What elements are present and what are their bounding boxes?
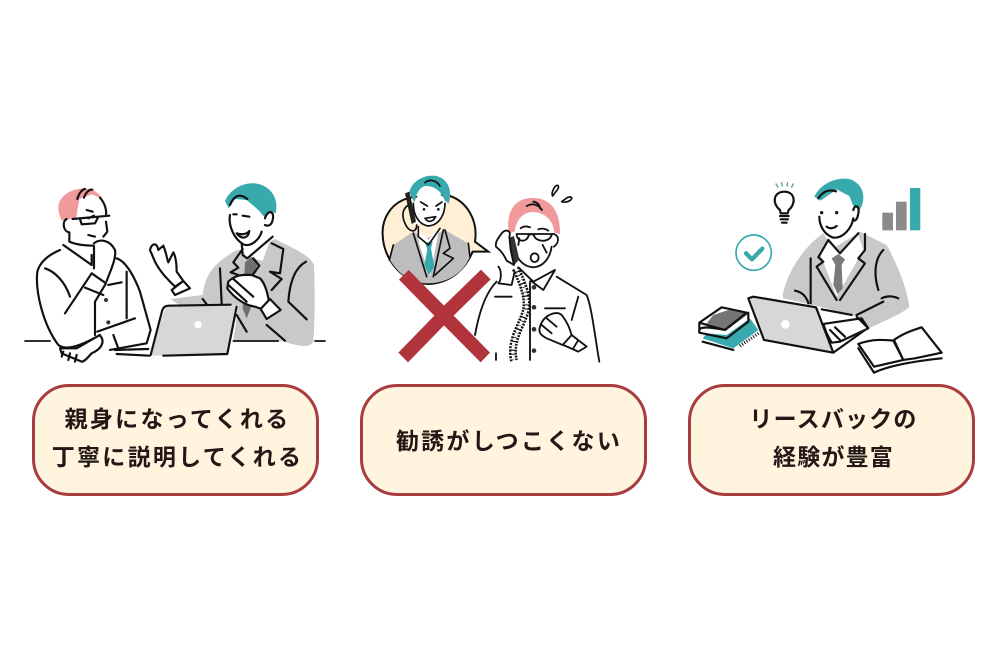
laptop (748, 297, 865, 353)
callout: rich leaseback experience (688, 384, 975, 496)
open notebook (858, 327, 942, 373)
callout: caring and explains carefully (32, 384, 319, 496)
check mark icon (736, 235, 771, 270)
red cross (398, 270, 491, 362)
advisor's teal hair (225, 183, 276, 218)
surprise marks (552, 185, 572, 202)
advisor outline (150, 196, 307, 341)
old man outline (37, 189, 151, 362)
salesman's suit (390, 230, 470, 283)
laptop (115, 305, 237, 356)
callout: not pushy: 勧誘がしつこくない (396, 428, 622, 454)
salesman's shirt and teal tie (417, 227, 440, 277)
shirt and tie (820, 235, 863, 297)
old man's pink hair (58, 188, 102, 220)
salesman's head (389, 176, 470, 277)
surprised man's body (475, 267, 599, 362)
callout: not pushy (360, 384, 647, 496)
typing hands (823, 317, 868, 343)
callout: rich leaseback experience: 経験が豊富 (773, 444, 894, 470)
table line (25, 338, 325, 343)
advisor's grey suit (171, 239, 315, 346)
callout: rich leaseback experience: リースバックの (749, 406, 918, 432)
head and suit outline (795, 190, 898, 315)
speech bubble (383, 195, 488, 284)
teal hair (814, 179, 863, 209)
callout: caring and explains carefully: 丁寧に説明してくれる (52, 444, 303, 470)
suit (783, 232, 909, 329)
handset and hand (496, 231, 519, 266)
advisor's dark tie (243, 257, 257, 318)
stack of books (699, 307, 758, 350)
surprised man's head and pink hair (508, 198, 560, 267)
coiled phone cord (513, 268, 527, 361)
advisor's white shirt front (243, 236, 272, 261)
light bulb (775, 183, 794, 223)
callout: caring and explains carefully: 親身になってくれる (65, 406, 290, 432)
bar chart icon (882, 188, 920, 230)
